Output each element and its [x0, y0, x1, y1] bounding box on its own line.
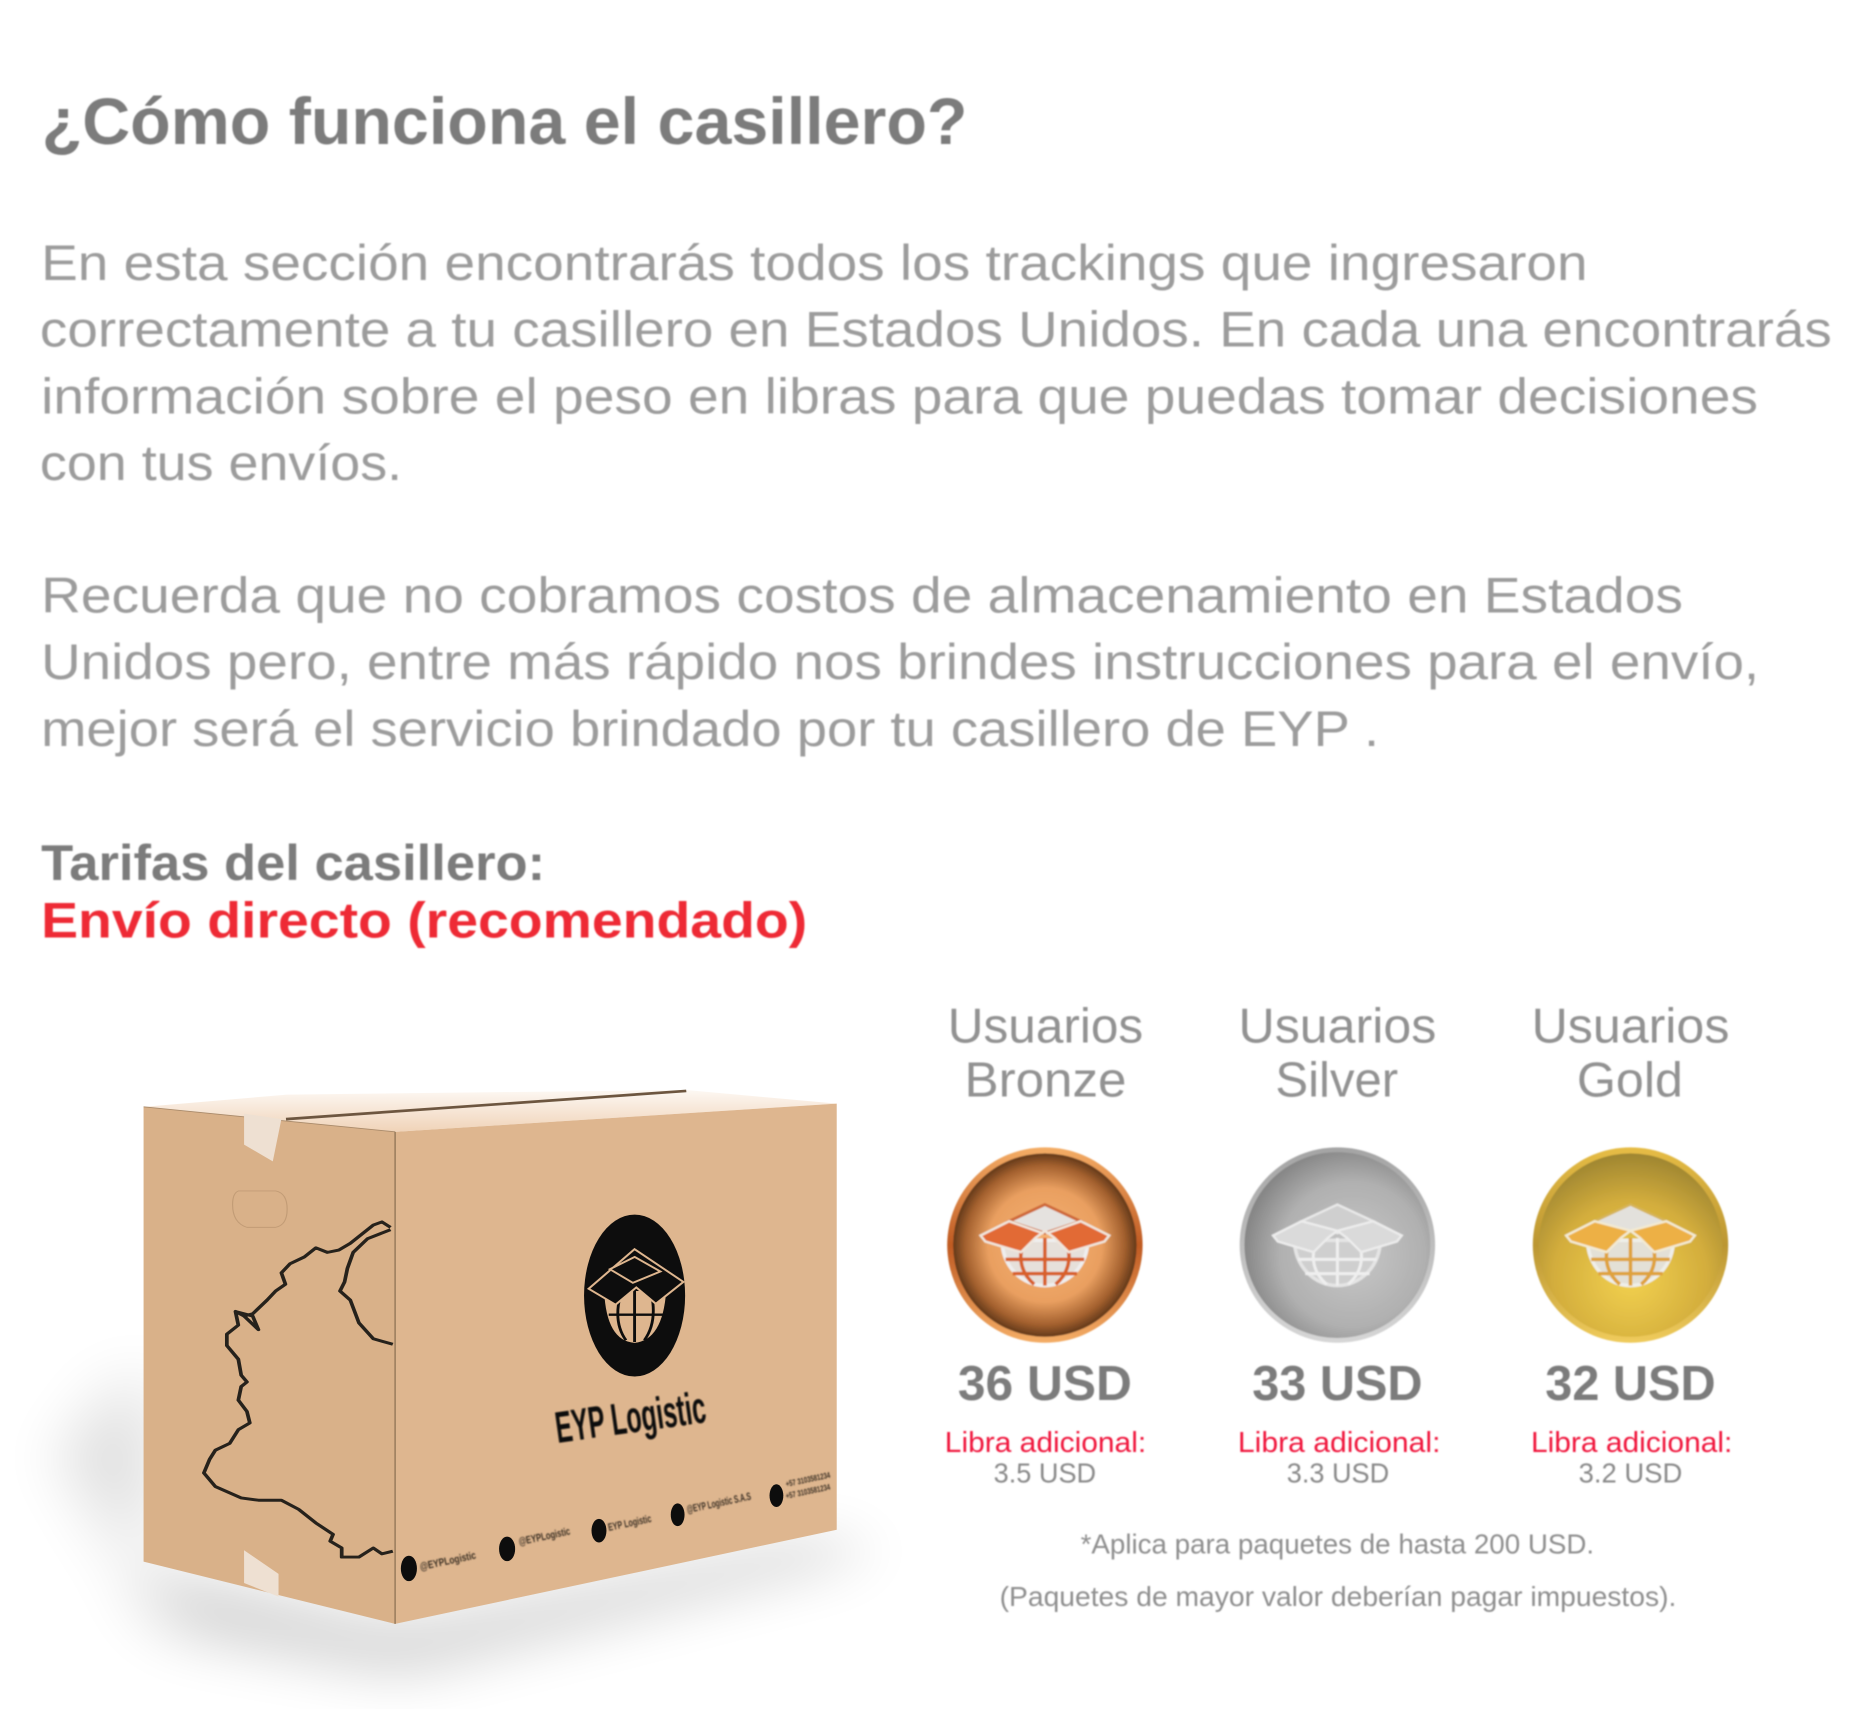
tape top [244, 1114, 281, 1161]
price: 36 USD: 36 USD [958, 1357, 1132, 1411]
text block: paragraph 2: Recuerda que no cobramos costos de almacenamiento en Estados [41, 567, 1683, 623]
subheading: tarifas [41, 835, 807, 949]
map of Colombia [204, 1222, 393, 1557]
footnote: (Paquetes de mayor valor deberían pagar impuestos). [1000, 1581, 1676, 1612]
additional pound: gold: Libra adicional: [1531, 1427, 1732, 1459]
box front face [395, 1104, 837, 1624]
logo face [589, 1249, 683, 1343]
social handles: EYP Logistic [607, 1513, 653, 1534]
label: Usuarios Silver [1239, 1000, 1436, 1108]
column: Bronze [945, 1000, 1146, 1489]
additional pound: bronze [945, 1427, 1146, 1489]
additional pound: gold [1531, 1427, 1732, 1489]
box top flaps [144, 1090, 837, 1132]
additional pound: bronze: 3.5 USD [994, 1458, 1096, 1489]
social handles: +57 3103581234 [785, 1482, 831, 1501]
logo wordmark: EYP Logistic [552, 1383, 709, 1453]
text block: paragraph 2: Unidos pero, entre más rápido nos brindes instrucciones para el envío, [41, 634, 1759, 690]
label: Usuarios Gold: Usuarios [1532, 1000, 1729, 1054]
medal: gold [1533, 1147, 1728, 1343]
text block: paragraph 2: mejor será el servicio brindado por tu casillero de EYP . [41, 701, 1379, 757]
text block: paragraph 1: correctamente a tu casillero en Estados Unidos. En cada una encontrarás [40, 302, 1832, 358]
additional pound: gold: 3.2 USD [1579, 1458, 1682, 1489]
social handles: @EYPLogistic [518, 1526, 571, 1548]
medal: bronze [947, 1147, 1143, 1343]
additional pound: silver: 3.3 USD [1287, 1458, 1389, 1489]
price: 32 USD: 32 USD [1545, 1357, 1716, 1411]
column: Silver [1238, 1000, 1440, 1489]
label: Usuarios Gold [1532, 1000, 1729, 1108]
hand hole [233, 1191, 287, 1227]
social handles: @EYPLogistic [419, 1550, 477, 1573]
label: Usuarios Silver: Usuarios [1239, 1000, 1436, 1054]
label: Usuarios Bronze: Usuarios [948, 1000, 1143, 1054]
label: Usuarios Bronze: Bronze [964, 1054, 1127, 1108]
text block: paragraph 1: información sobre el peso en libras para que puedas tomar decisiones [41, 368, 1758, 424]
social handles: @EYP Logistic S.A.S [686, 1491, 752, 1516]
footnote: *Aplica para paquetes de hasta 200 USD. [1081, 1529, 1594, 1560]
label: Usuarios Silver: Silver [1275, 1054, 1398, 1108]
additional pound: bronze: Libra adicional: [945, 1427, 1146, 1459]
additional pound: silver: Libra adicional: [1238, 1427, 1440, 1459]
column: Gold [1531, 1000, 1732, 1489]
label: Usuarios Gold: Gold [1577, 1054, 1683, 1108]
text block: paragraph 2 [41, 567, 1759, 757]
illustration: cardboard box [69, 1090, 856, 1678]
label: Usuarios Bronze [948, 1000, 1143, 1108]
social handles [419, 1470, 831, 1573]
additional pound: silver [1238, 1427, 1440, 1489]
subheading: tarifas: Envío directo (recomendado) [41, 893, 807, 949]
tape bottom [244, 1550, 279, 1597]
social handles: +57 3103581234 [785, 1470, 831, 1489]
logo circle [584, 1215, 685, 1377]
footnote [1000, 1529, 1676, 1612]
social icons [401, 1484, 783, 1581]
text block: paragraph 1 [40, 235, 1832, 491]
subheading: tarifas: Tarifas del casillero: [41, 835, 545, 891]
medal: silver [1240, 1147, 1435, 1343]
box left face [144, 1107, 395, 1624]
title: ¿Cómo funciona el casillero? [42, 85, 967, 158]
text block: paragraph 1: En esta sección encontrarás todos los trackings que ingresaron [41, 235, 1588, 291]
text block: paragraph 1: con tus envíos. [40, 435, 402, 491]
price: 33 USD: 33 USD [1252, 1357, 1423, 1411]
